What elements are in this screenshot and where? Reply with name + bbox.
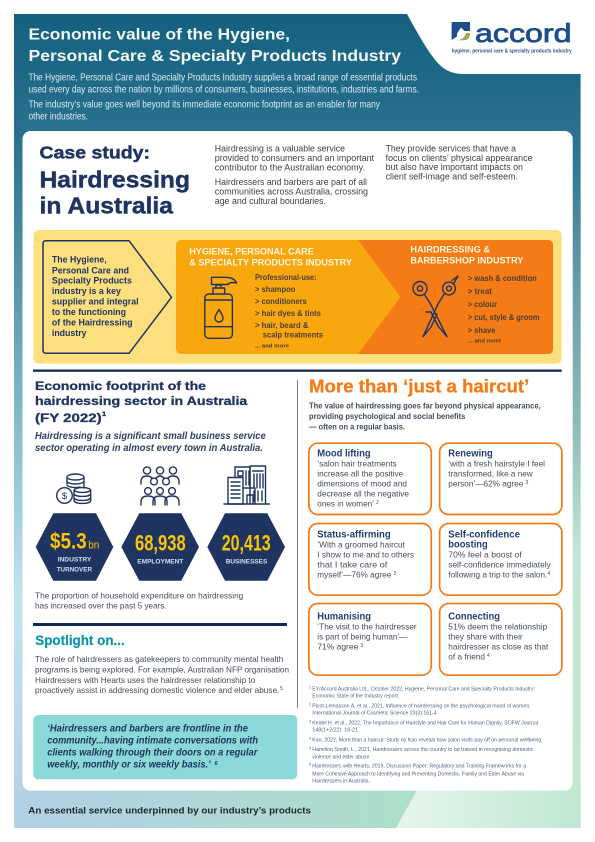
references: 6 <box>309 762 311 766</box>
stat hexagon: turnover: bn <box>88 539 99 551</box>
heading: case study <box>40 142 190 218</box>
references: Kao, 2022, More than a haircut: Study by Kao reveals how salon visits pay off on personal wellbeing <box>312 738 541 744</box>
italic subheading: Hairdressing is a significant small business service <box>35 431 266 442</box>
heading: economic footprint: Economic footprint of the <box>35 379 206 393</box>
case study text column 1: Hairdressers and barbers are part of all <box>215 177 367 188</box>
card: humanising <box>309 604 431 675</box>
spotlight text: proactively assist in addressing domestic violence and elder abuse. <box>35 686 279 695</box>
card: status-affirming: ‘With a groomed haircut <box>317 541 406 550</box>
haircut intro text: The value of hairdressing goes far beyond physical appearance, <box>309 402 541 411</box>
references: 3 <box>309 720 311 724</box>
references: More Cohesive Approach to Identifying and Preventing Domestic, Family and Elder Abuse via <box>312 772 525 778</box>
haircut intro text <box>309 402 541 432</box>
arrow callout: key supplier: to the functioning <box>52 307 126 317</box>
references: Keidel H. et al., 2022, The Importance of Hairstyle and Hair Care for Human Dignity, SOFW Journal <box>312 721 538 727</box>
arrow callout: key supplier: Specialty Products <box>52 276 132 286</box>
stat hexagon: turnover: TURNOVER <box>57 567 92 574</box>
stat hexagon: businesses: BUSINESSES <box>226 559 268 566</box>
case study text column 1: Hairdressing is a valuable service <box>215 144 345 155</box>
panel: hairdressing and barbershop industry: HAIRDRESSING & <box>410 244 490 255</box>
panel: hygiene products industry <box>176 240 553 354</box>
card: renewing: Renewing <box>448 449 493 460</box>
case study text column 2: but also have important impacts on <box>386 162 523 173</box>
intro text: The Hygiene, Personal Care and Specialty Products Industry supplies a broad range of essential products <box>28 73 417 84</box>
references: Picot-Lemasson A. et al., 2021, Influence of hairdressing on the psychological mood of women, <box>312 704 531 710</box>
logo: accord: hygiene, personal care & specialty products industry <box>452 49 572 55</box>
references: EY/Accord Australia Ltd., October 2022, Hygiene, Personal Care and Specialty Products Industry: <box>312 687 535 693</box>
stat hexagon: turnover: $5.3 <box>50 528 87 553</box>
case study text column 2 <box>386 144 532 182</box>
icon: coins: $ <box>62 491 68 502</box>
references: 2 <box>309 702 311 706</box>
panel: hygiene products industry: & SPECIALTY PRODUCTS INDUSTRY <box>189 257 353 268</box>
stat hexagon: employment <box>121 513 199 581</box>
card: self-confidence boosting <box>440 524 562 595</box>
case study text column 1: communities across Australia, crossing <box>215 187 368 198</box>
card: humanising: Humanising <box>317 612 371 623</box>
list: services: > shave <box>468 325 496 335</box>
references: International Journal of Cosmetic Science 23(3):161-4 <box>312 711 437 717</box>
card: status-affirming: Status-affirming <box>317 530 391 541</box>
heading: case study: Hairdressing <box>40 166 190 192</box>
quote callout: ‘Hairdressers and barbers are frontline in the <box>47 724 249 735</box>
spotlight text: programs is being explored. For example, Australian NFP organisation <box>35 665 289 674</box>
household expenditure note <box>35 592 244 611</box>
references: Economic State of the Industry report. <box>312 694 400 700</box>
references: 1 <box>309 686 311 690</box>
case study text column 1 <box>215 144 374 207</box>
card: mood lifting: ‘salon hair treatments <box>317 460 397 469</box>
intro text: The industry’s value goes well beyond its immediate economic footprint as an enabler for many <box>28 100 381 111</box>
card: mood lifting: ones in women’ <box>317 500 374 509</box>
arrow callout: key supplier: industry is a key <box>52 286 122 296</box>
references: Hairdressers with Hearts, 2019, Discussion Paper: Regulatory and Training Frameworks for a <box>312 764 527 770</box>
list: professional-use products: > hair dyes & tints <box>255 308 321 318</box>
arrow callout: key supplier: The Hygiene, <box>52 255 107 265</box>
quote callout: clients walking through their doors on a regular <box>47 748 258 759</box>
references: violence and elder abuse <box>312 755 370 761</box>
heading: case study: in Australia <box>40 192 174 218</box>
panel: hygiene products industry: HYGIENE, PERSONAL CARE <box>189 246 314 257</box>
icon: buildings <box>224 466 269 504</box>
list: professional-use products: > shampoo <box>255 284 295 294</box>
case study text column 1: contributor to the Australian economy. <box>215 163 365 174</box>
heading: economic footprint: 1 <box>102 412 107 418</box>
card: connecting <box>440 604 562 675</box>
main white card <box>22 131 573 791</box>
card: self-confidence boosting: boosting <box>448 540 488 551</box>
icon: scissors <box>413 276 458 337</box>
card: humanising: is part of being human’— <box>317 633 408 642</box>
title: Personal Care & Specialty Products Industry <box>28 48 402 65</box>
card: renewing: ‘with a fresh hairstyle I feel <box>448 460 545 469</box>
references <box>309 686 541 785</box>
household expenditure note: The proportion of household expenditure on hairdressing <box>35 592 244 601</box>
heading: economic footprint: (FY 2022) <box>35 411 102 425</box>
list: services: > treat <box>468 286 492 296</box>
stat hexagon: employment: 68,938 <box>135 530 186 555</box>
list: services: ... and more <box>468 339 502 345</box>
card: renewing: person’—62% agree <box>448 480 524 489</box>
card: humanising: 71% agree <box>317 643 359 652</box>
household expenditure note: has increased over the past 5 years. <box>35 602 167 611</box>
card: connecting: of a friend <box>448 653 485 662</box>
card: self-confidence boosting: 70% feel a boost of <box>448 551 522 560</box>
list: services <box>468 273 540 345</box>
card: connecting: 4 <box>487 653 490 659</box>
quote callout <box>33 715 297 779</box>
list: services: > wash & condition <box>468 273 537 283</box>
arrow callout: key supplier <box>43 241 172 353</box>
references: 5 <box>309 746 311 750</box>
card: connecting: hairdresser as close as that <box>448 643 549 652</box>
card: self-confidence boosting: Self-confidence <box>448 530 521 541</box>
haircut intro text: — often on a regular basis. <box>309 423 405 432</box>
intro text: used every day across the nation by millions of consumers, businesses, institutions, industries and farms. <box>28 85 419 96</box>
spotlight text <box>35 655 289 695</box>
card: mood lifting: increase all the positive <box>317 470 404 479</box>
panel: hairdressing and barbershop industry: BARBERSHOP INDUSTRY <box>410 255 524 266</box>
panel: hairdressing and barbershop industry <box>358 240 553 354</box>
heading: economic footprint: hairdressing sector in Australia <box>35 394 247 408</box>
list: professional-use products: > hair, beard & <box>255 320 308 330</box>
card: humanising: 3 <box>360 643 364 649</box>
card: mood lifting: 2 <box>376 500 379 506</box>
card: status-affirming: 3 <box>394 571 396 577</box>
card: humanising: ‘The visit to the hairdresser <box>317 623 417 632</box>
case study text column 2: They provide services that have a <box>386 144 517 155</box>
list: professional-use products: > conditioners <box>255 296 307 306</box>
card: status-affirming <box>309 524 431 595</box>
case study text column 2: focus on clients’ physical appearance <box>386 153 532 164</box>
title: Economic value of the Hygiene, <box>28 26 290 44</box>
panel: value chain <box>34 230 562 364</box>
case study text column 2: client self-image and self-esteem. <box>386 171 518 182</box>
references: Hairdressers in Australia. <box>312 779 370 785</box>
case study text column 1: provided to consumers and an important <box>215 153 374 164</box>
list: services: > cut, style & groom <box>468 312 540 322</box>
card: mood lifting <box>309 443 431 514</box>
list: professional-use products: scalp treatments <box>263 330 323 340</box>
card: connecting: they share with their <box>448 633 523 642</box>
list: professional-use products <box>255 272 323 350</box>
card: status-affirming: myself’—76% agree <box>317 571 392 580</box>
quote callout: community...having intimate conversations with <box>47 736 258 747</box>
arrow callout: key supplier: of the Hairdressing <box>52 318 133 328</box>
quote callout: weekly, monthly or six weekly basis.’ <box>47 760 211 771</box>
references: 4 <box>309 736 311 740</box>
card: renewing <box>440 443 562 514</box>
stat hexagon: businesses: 20,413 <box>222 530 271 555</box>
card: renewing: transformed, like a new <box>448 470 533 479</box>
case study text column 1: age and cultural boundaries. <box>215 196 326 207</box>
icon: pump bottle <box>205 277 237 338</box>
stat hexagon: turnover <box>36 513 113 581</box>
spotlight text: The role of hairdressers as gatekeepers to community mental health <box>35 655 284 664</box>
list: services: > colour <box>468 299 498 309</box>
card: self-confidence boosting: self-confidence immediately <box>448 561 552 570</box>
title <box>28 26 402 65</box>
card: mood lifting: dimensions of mood and <box>317 480 407 489</box>
card: status-affirming: I show to me and to others <box>317 551 414 560</box>
intro text: other industries. <box>28 111 88 122</box>
references: Hamilton-Smith, L., 2021, Hairdressers across the country to be trained in recognising domestic <box>312 747 533 753</box>
list: professional-use products: Professional-use: <box>255 272 317 282</box>
icon: coins <box>57 474 91 503</box>
card: mood lifting: Mood lifting <box>317 449 371 460</box>
logo: accord: accord <box>475 18 572 48</box>
quote callout: 6 <box>214 761 218 767</box>
heading: spotlight: Spotlight on... <box>35 633 125 648</box>
arrow callout: key supplier: supplier and integral <box>52 296 139 306</box>
arrow callout: key supplier: Personal Care and <box>52 265 129 275</box>
references: 148(1+2/22): 16-21 <box>312 728 358 734</box>
card: status-affirming: that I take care of <box>317 561 388 570</box>
list: professional-use products: ... and more <box>255 344 290 350</box>
heading: economic footprint <box>35 379 247 425</box>
spotlight text: Hairdressers with Hearts uses the hairdresser relationship to <box>35 676 256 685</box>
spotlight text: 5 <box>280 686 283 692</box>
heading: case study: Case study: <box>40 142 150 162</box>
card: renewing: 3 <box>526 480 528 486</box>
intro text <box>28 73 419 122</box>
stat hexagon: businesses <box>207 513 285 581</box>
italic subheading: sector operating in almost every town in Australia. <box>35 443 263 454</box>
arrow callout: key supplier: industry <box>52 328 87 338</box>
card: connecting: Connecting <box>448 612 500 623</box>
haircut intro text: providing psychological and social benefits <box>309 412 466 421</box>
card: mood lifting: decrease all the negative <box>317 490 409 499</box>
logo: accord <box>452 18 572 55</box>
stat hexagon: turnover: INDUSTRY <box>58 557 92 564</box>
italic subheading <box>35 431 266 454</box>
card: self-confidence boosting: 4 <box>548 571 550 577</box>
icon: people <box>141 467 179 505</box>
stat hexagon: employment: EMPLOYMENT <box>137 559 184 566</box>
heading: more than just a haircut: More than ‘just a haircut’ <box>309 376 529 397</box>
footer statement: An essential service underpinned by our industry’s products <box>28 806 311 817</box>
card: self-confidence boosting: following a trip to the salon. <box>448 571 547 580</box>
card: connecting: 51% deem the relationship <box>448 623 548 632</box>
